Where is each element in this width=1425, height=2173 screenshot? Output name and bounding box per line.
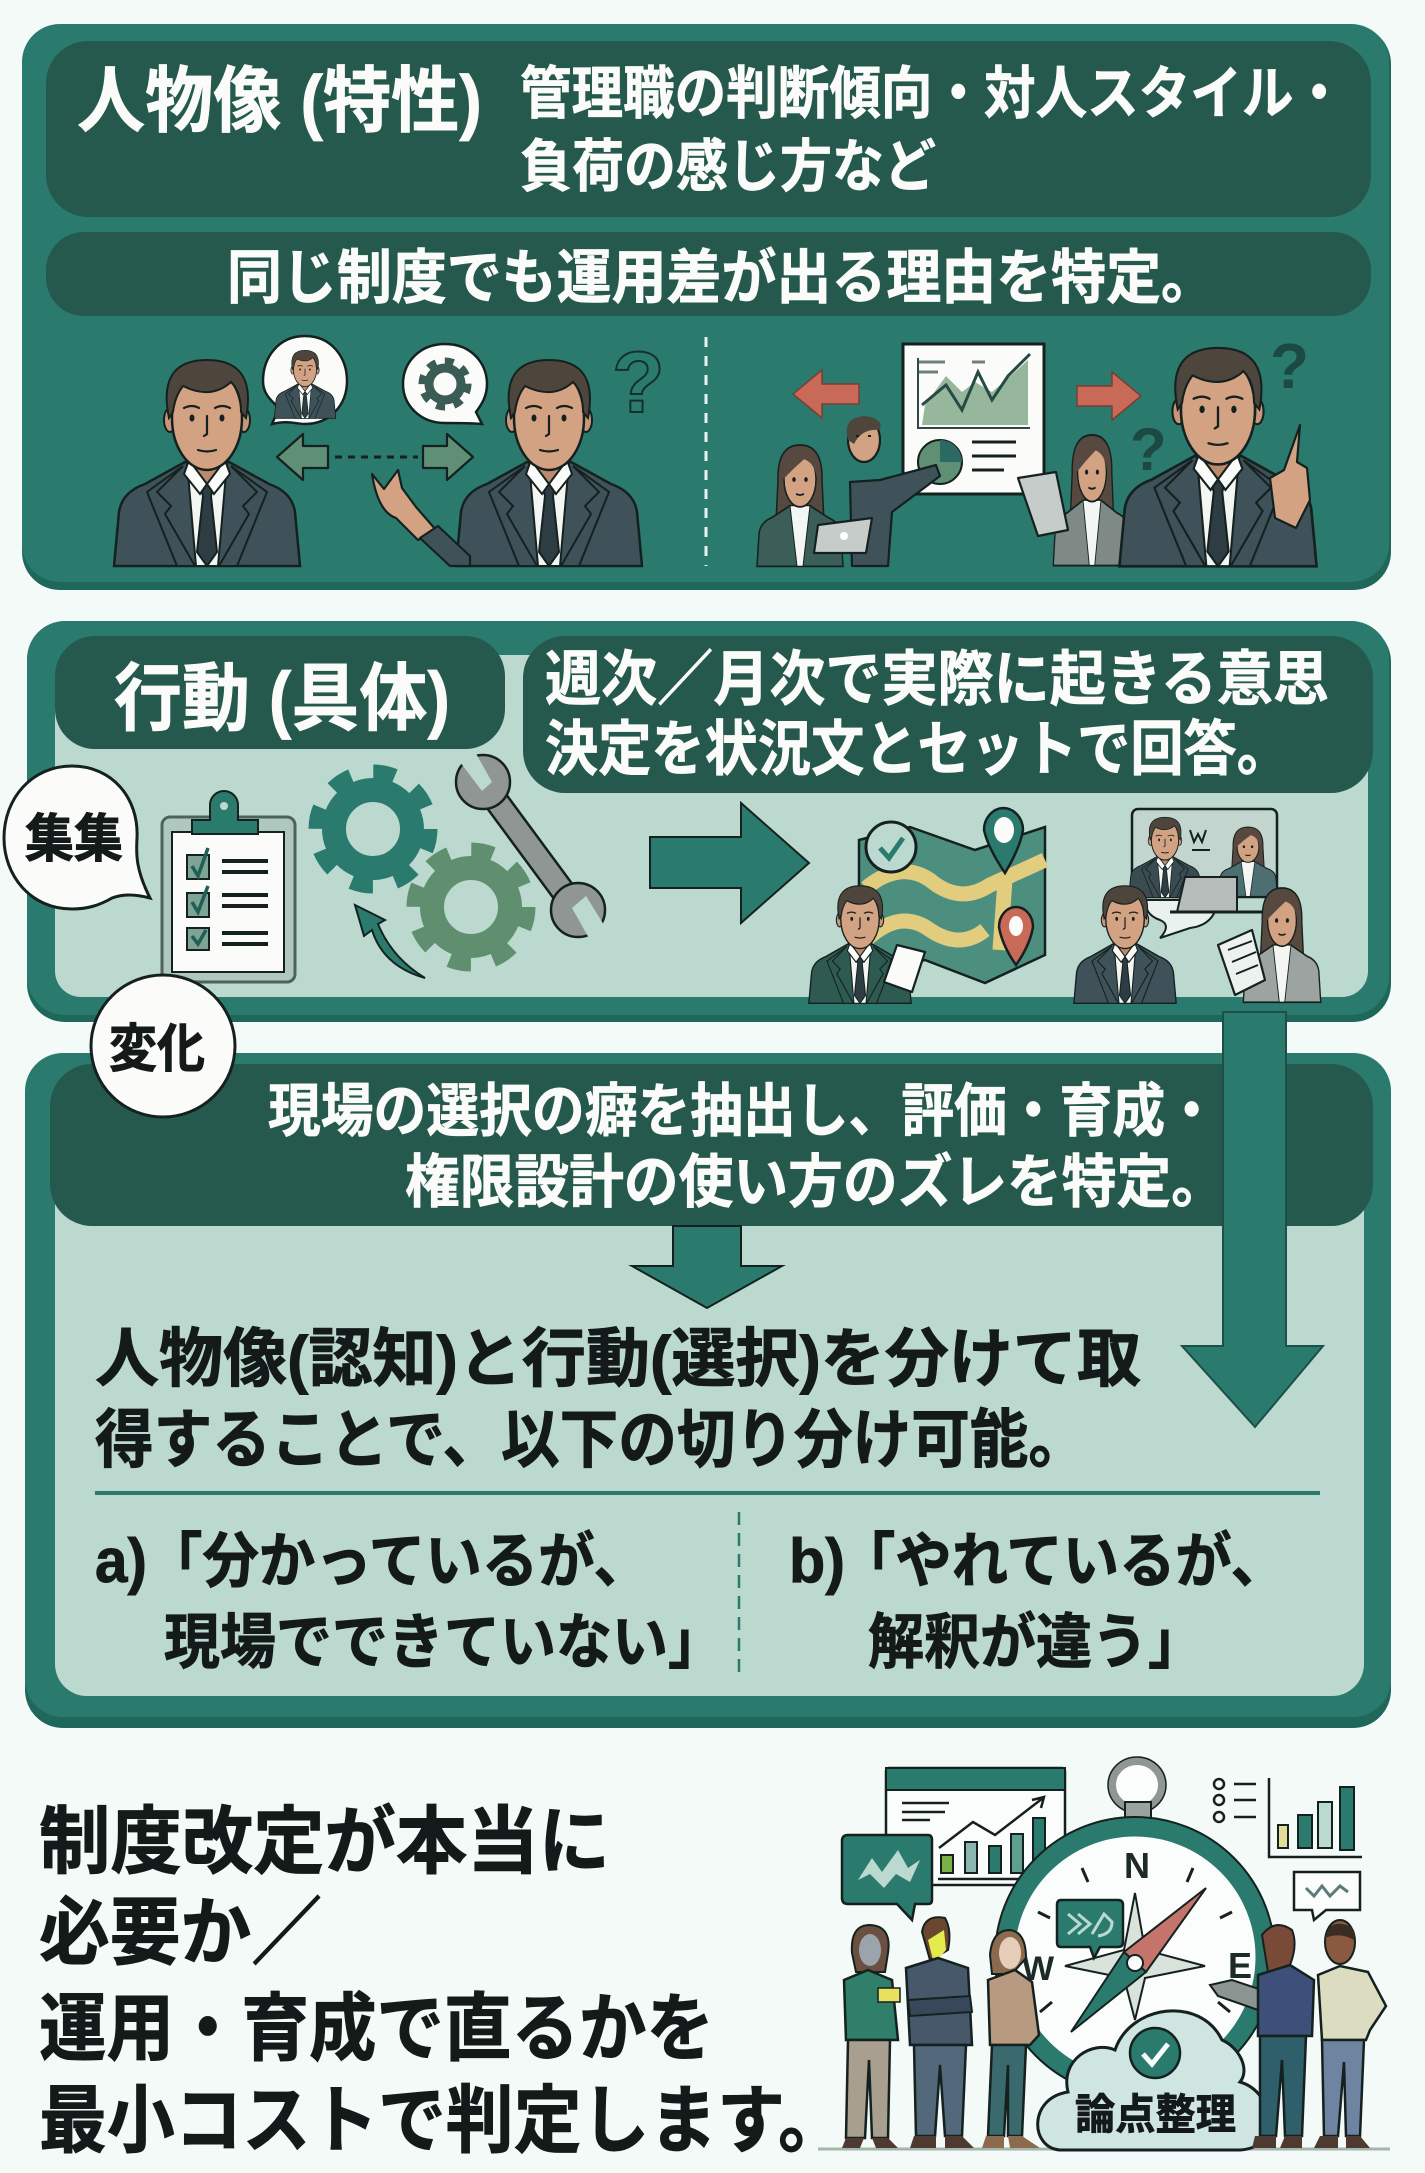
compass <box>995 1817 1275 2097</box>
icon: green gear <box>414 850 528 964</box>
icon: gear speech bubble <box>403 344 487 424</box>
woman with laptop <box>757 445 872 566</box>
option b <box>789 1527 1287 1676</box>
sub bar text: 同じ制度でも運用差が出る理由を特定。 <box>227 245 1216 311</box>
map <box>859 808 1045 983</box>
option a <box>95 1527 724 1676</box>
heading: 行動(具体): 行動 (具体) <box>114 657 450 740</box>
cloud badge <box>1038 2011 1269 2150</box>
compass: W <box>1022 1950 1055 1988</box>
description text <box>520 62 1345 199</box>
compass ring <box>1108 1757 1166 1818</box>
laptop <box>1177 877 1237 912</box>
pointing hand <box>1270 425 1310 528</box>
header text <box>268 1079 1226 1215</box>
body text: 得することで、以下の切り分け可能。 <box>95 1404 1087 1476</box>
cloud badge: 論点整理 <box>1075 2091 1236 2138</box>
header block <box>50 1064 1373 1226</box>
list icon <box>1214 1779 1256 1822</box>
panel: 人物像 <box>22 24 1391 590</box>
description text: 管理職の判断傾向・対人スタイル・ <box>520 62 1345 126</box>
bubble: 変化 <box>91 975 235 1117</box>
arrow: red left <box>793 370 859 418</box>
icon: clipboard <box>162 791 295 982</box>
person 3 <box>982 1930 1040 2148</box>
ground line <box>818 2148 1390 2150</box>
large man <box>1119 348 1317 566</box>
panel base <box>27 621 1391 1022</box>
option b: 解釈が違う」 <box>868 1609 1204 1676</box>
panel: 変化 <box>25 1012 1391 1728</box>
question marks <box>1130 330 1309 483</box>
sleeve <box>420 526 470 566</box>
video conference screen <box>1129 809 1277 898</box>
dashed divider <box>704 337 708 566</box>
man talking <box>1074 886 1176 1003</box>
table edge <box>1170 910 1270 914</box>
bubble: 集集: 集集 <box>25 811 123 869</box>
arrow: red right <box>1077 372 1141 420</box>
description text: 負荷の感じ方など <box>520 135 936 199</box>
arrow: small down <box>632 1226 782 1308</box>
conclusion text: 必要か／ <box>39 1891 322 1974</box>
header text: 現場の選択の癖を抽出し、評価・育成・ <box>268 1079 1218 1144</box>
description text: 決定を状況文とセットで回答。 <box>545 716 1290 783</box>
bar chart <box>1269 1778 1362 1857</box>
header text: 権限設計の使い方のズレを特定。 <box>405 1150 1226 1215</box>
description pill <box>523 636 1373 793</box>
man right <box>456 360 642 566</box>
description text <box>545 646 1329 783</box>
person 5 <box>1314 1920 1386 2148</box>
conclusion text: 制度改定が本当に <box>39 1800 610 1883</box>
woman with tablet <box>1018 435 1131 566</box>
description text: 週次／月次で実際に起きる意思 <box>545 646 1329 713</box>
header block <box>46 41 1371 217</box>
heading pill <box>55 636 505 749</box>
heading: 人物像(特性): 人物像 (特性) <box>77 62 482 142</box>
conclusion text: 運用・育成で直るかを <box>39 1987 714 2070</box>
compass: N <box>1124 1845 1150 1886</box>
question marks: ? <box>1130 416 1167 483</box>
teal speech bubble <box>842 1835 932 1920</box>
divider <box>95 1491 1320 1495</box>
bubble: 変化: 変化 <box>109 1021 205 1079</box>
double arrow <box>277 434 473 480</box>
question marks: ? <box>1270 330 1309 402</box>
man left <box>114 360 300 566</box>
woman with tablet <box>1218 888 1321 1002</box>
small teal bubble <box>1057 1900 1123 1958</box>
body text: 人物像(認知)と行動(選択)を分けて取 <box>95 1323 1141 1395</box>
arrow: right <box>650 803 809 923</box>
dashboard <box>886 1768 1065 1885</box>
person 1 <box>842 1925 900 2148</box>
small white bubble <box>1294 1872 1360 1920</box>
option a: 現場でできていない」 <box>164 1609 724 1676</box>
icon: teal gear <box>316 772 430 886</box>
compass: E <box>1228 1945 1252 1986</box>
conclusion text <box>39 1800 846 2162</box>
man with clipboard <box>809 886 925 1003</box>
icon: wrench <box>456 750 605 940</box>
option a: 「分かっているが、 <box>146 1528 650 1595</box>
question mark: ? <box>612 335 665 431</box>
body text <box>95 1323 1141 1476</box>
sub bar <box>46 232 1371 316</box>
icon: person speech bubble <box>263 336 347 424</box>
icon: open hand <box>372 470 436 540</box>
curved arrow <box>355 905 425 978</box>
illustration: compass team <box>818 1757 1390 2150</box>
presenter man <box>847 416 940 566</box>
panel base <box>22 24 1391 590</box>
panel base <box>25 1053 1391 1728</box>
option a: a) <box>95 1527 147 1596</box>
person 4 <box>1210 1925 1314 2148</box>
document with chart <box>903 344 1044 494</box>
person 2 <box>906 1917 974 2148</box>
panel: 行動 <box>4 621 1391 1022</box>
arrow: long down <box>1182 1012 1323 1427</box>
option b: b) <box>789 1527 845 1596</box>
bubble: 集集 <box>4 766 150 909</box>
conclusion text: 最小コストで判定します。 <box>39 2079 846 2162</box>
option b: 「やれているが、 <box>839 1528 1287 1595</box>
speech bubble <box>1145 900 1218 938</box>
